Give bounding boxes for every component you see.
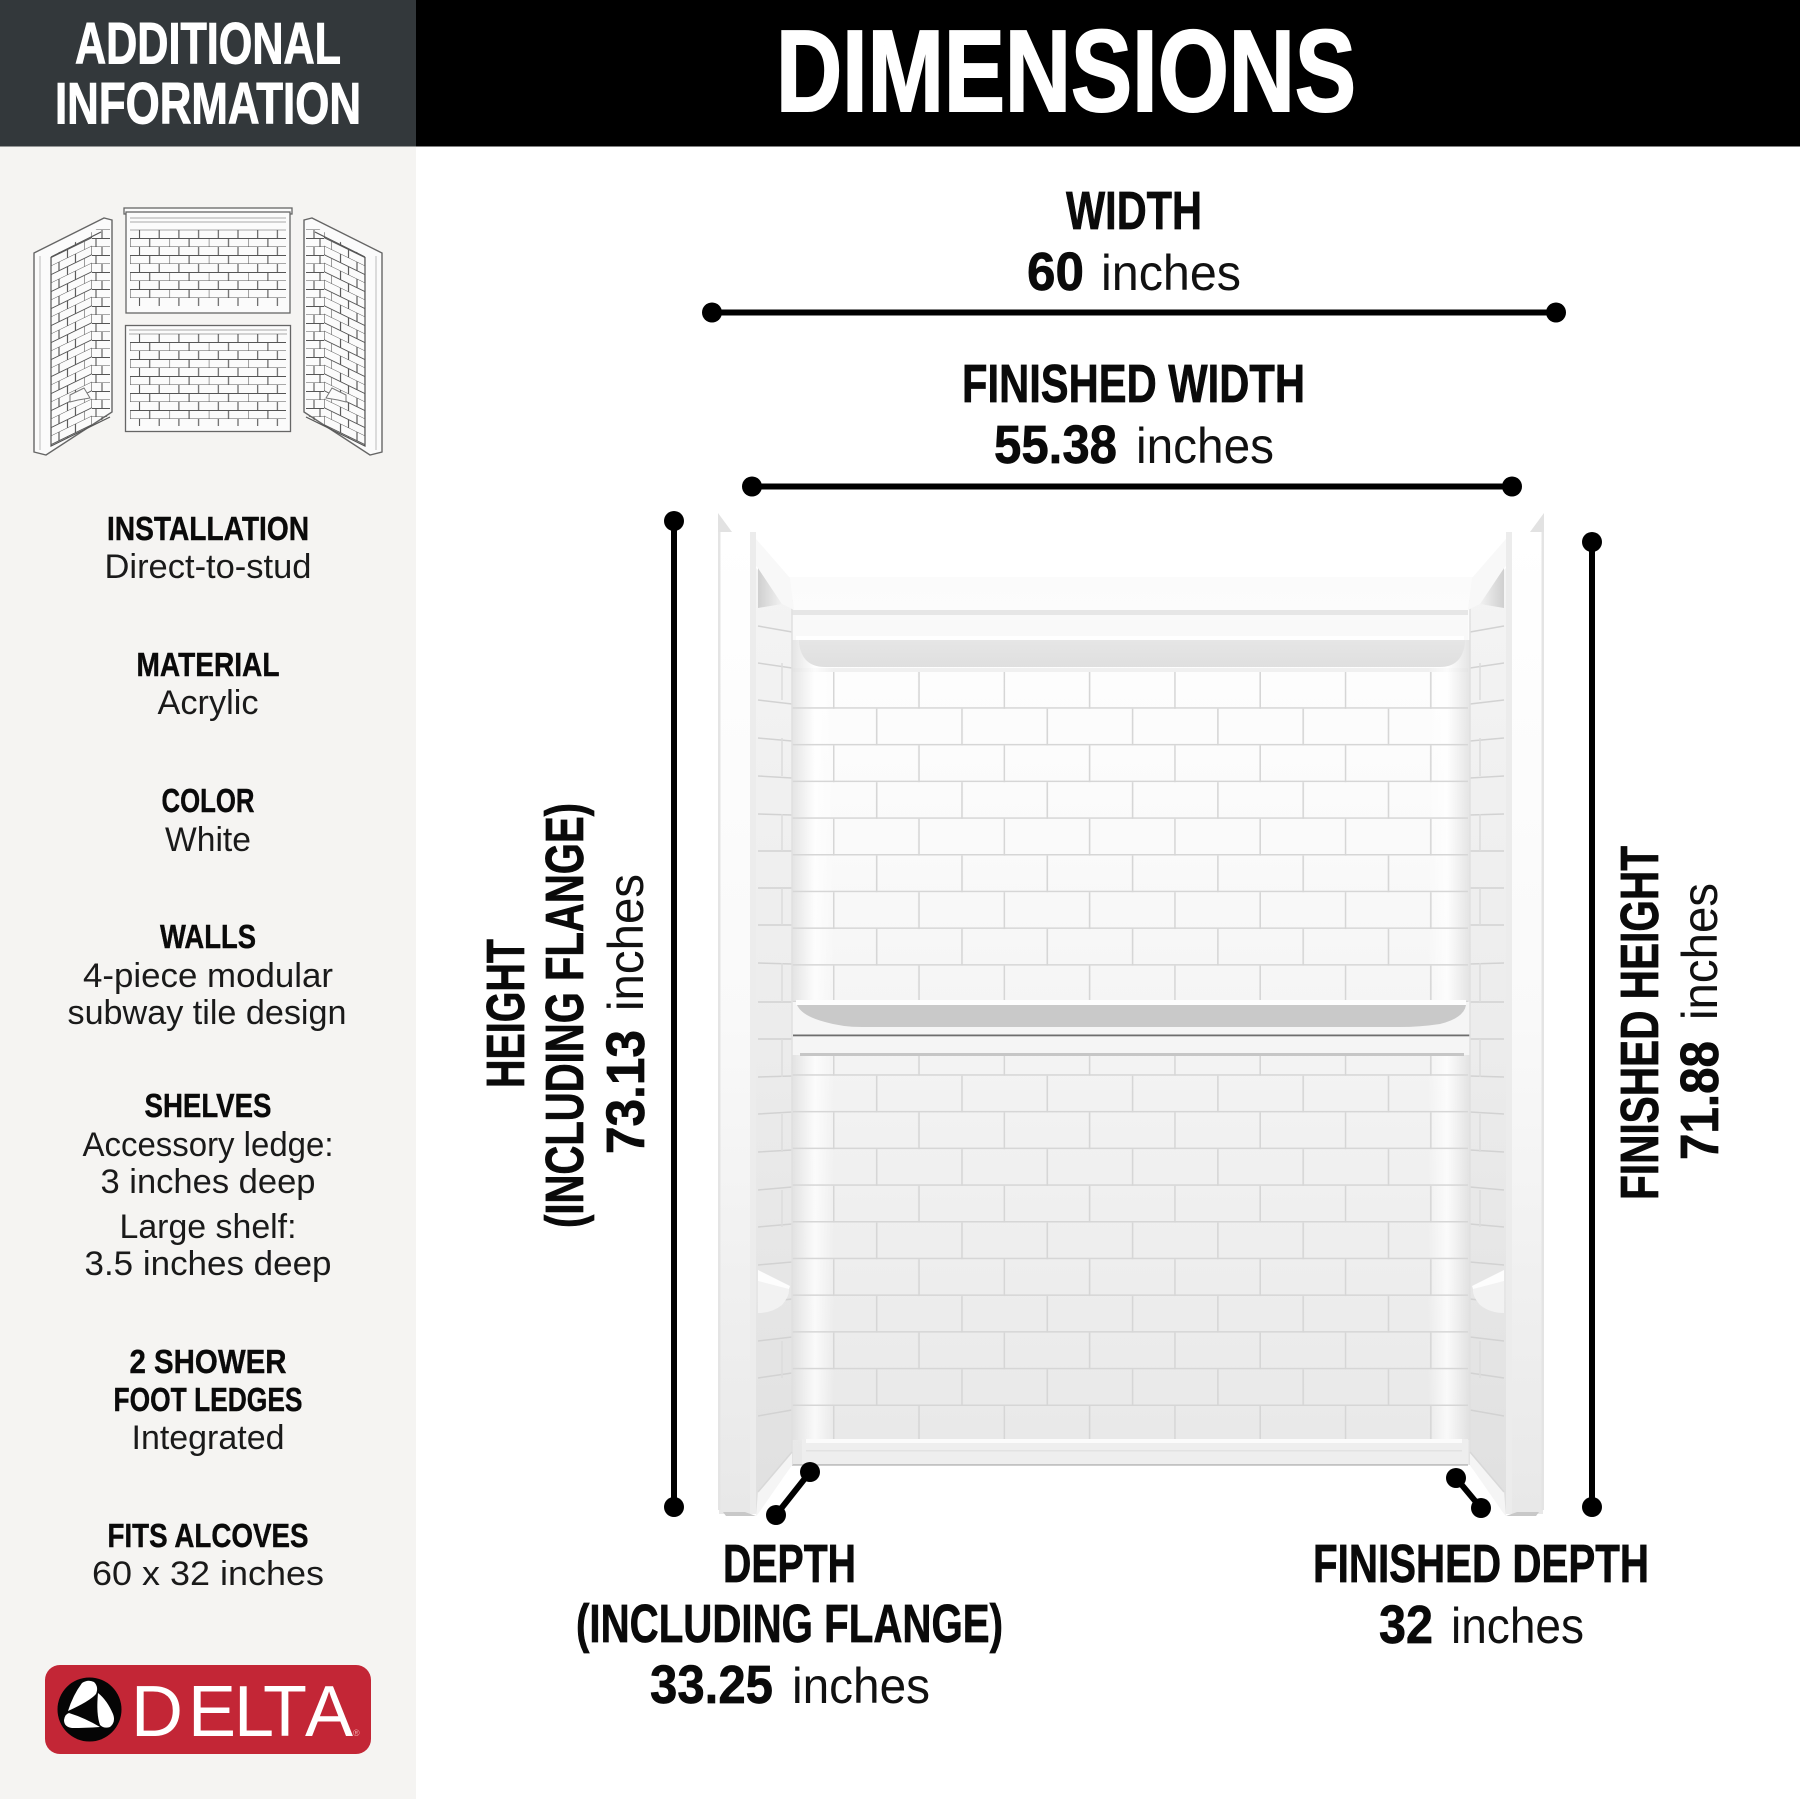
text: walls: 4-piece modular <box>83 957 333 995</box>
title: dimensions <box>416 0 1800 146</box>
product image: shower walls <box>718 513 1544 1516</box>
text: material: Acrylic <box>158 684 258 722</box>
text: fits alcoves: 60 x 32 inches <box>92 1555 324 1593</box>
dimension: depth including flange: 33.25 <box>650 1655 773 1715</box>
panel drawing: right side wall <box>304 218 382 455</box>
dimension: width <box>702 181 1566 322</box>
text: installation: Direct-to-stud <box>104 548 312 586</box>
baseboard <box>792 1439 1468 1466</box>
text: fits alcoves: FITS ALCOVES <box>108 1517 308 1554</box>
dimension: finished width: FINISHED WIDTH <box>962 354 1305 414</box>
right wall section <box>1468 513 1544 1516</box>
dimension: height including flange <box>476 511 684 1517</box>
back wall <box>782 577 1480 1465</box>
text: shower foot ledges: Integrated <box>132 1419 284 1457</box>
panel drawing: bottom back wall <box>126 326 290 432</box>
dimension: depth including flange: inches <box>792 1658 930 1714</box>
dimension: finished width: inches <box>1136 418 1274 474</box>
dimension: finished depth: inches <box>1451 1598 1584 1654</box>
text: shelves: Accessory ledge: <box>82 1126 334 1164</box>
header: additional information <box>0 0 416 146</box>
dimension: height including flange: 73.13 <box>596 1030 656 1154</box>
dimension: finished height <box>1582 532 1730 1517</box>
text: walls <box>68 918 346 1032</box>
subway tile grid <box>792 672 1468 1439</box>
text: shelves: SHELVES <box>144 1087 272 1124</box>
text: installation: INSTALLATION <box>107 510 309 547</box>
dimension: finished height: 71.88 <box>1670 1041 1730 1160</box>
logo: delta <box>45 1665 371 1754</box>
dimension: depth including flange <box>576 1462 1003 1715</box>
corner highlight: left <box>792 640 834 1440</box>
dimension: finished width <box>742 354 1522 496</box>
upper accessory ledge <box>799 640 1465 667</box>
panel drawing: left side wall <box>34 218 112 455</box>
text: material <box>136 646 280 722</box>
text: shelves <box>82 1087 334 1283</box>
dimension: finished height: FINISHED HEIGHT <box>1610 846 1670 1200</box>
dimension: depth including flange: DEPTH <box>723 1534 856 1594</box>
dimension: depth including flange: (INCLUDING FLANGE) <box>576 1594 1003 1654</box>
dimension: finished height: inches <box>1672 883 1728 1020</box>
text: color <box>162 782 255 859</box>
dimension: height including flange: HEIGHT <box>476 939 536 1088</box>
left wall section <box>718 513 794 1516</box>
dimension: height including flange: (INCLUDING FLANGE) <box>535 803 595 1228</box>
text: fits alcoves <box>92 1517 324 1593</box>
large shelf <box>792 1000 1470 1056</box>
dimension: width: 60 <box>1027 242 1084 302</box>
panel drawing: top back wall <box>124 208 292 313</box>
text: shelves: 3.5 inches deep <box>84 1245 332 1283</box>
logo: delta: DELTA <box>131 1672 353 1752</box>
text: shower foot ledges: 2 SHOWER <box>130 1343 287 1380</box>
dimension: finished depth: FINISHED DEPTH <box>1313 1534 1649 1594</box>
corner highlight: right <box>1428 640 1470 1440</box>
text: shower foot ledges <box>114 1343 302 1457</box>
text: installation <box>104 510 312 586</box>
title: dimensions: DIMENSIONS <box>776 6 1356 136</box>
text: shelves: Large shelf: <box>120 1208 296 1246</box>
text: material: MATERIAL <box>136 646 280 683</box>
text: color: White <box>165 821 251 859</box>
text: shelves: 3 inches deep <box>100 1163 316 1201</box>
illustration: four-piece wall panels <box>34 208 382 455</box>
dimension: finished depth <box>1313 1468 1649 1655</box>
text: walls: subway tile design <box>68 994 346 1032</box>
dimension: width: WIDTH <box>1066 181 1202 241</box>
white ledge lip <box>796 636 1464 640</box>
dimension: width: inches <box>1101 245 1241 301</box>
logo: delta: ® <box>353 1728 360 1738</box>
panel: additional information sidebar <box>0 146 416 1799</box>
text: walls: WALLS <box>160 918 256 955</box>
dimension: finished width: 55.38 <box>994 415 1117 475</box>
dimension: finished depth: 32 <box>1379 1595 1433 1655</box>
text: color: COLOR <box>162 782 255 819</box>
dimension: height including flange: inches <box>598 874 654 1011</box>
header: additional information: ADDITIONAL <box>75 12 341 76</box>
text: shower foot ledges: FOOT LEDGES <box>114 1381 302 1418</box>
header: additional information: INFORMATION <box>55 72 361 136</box>
